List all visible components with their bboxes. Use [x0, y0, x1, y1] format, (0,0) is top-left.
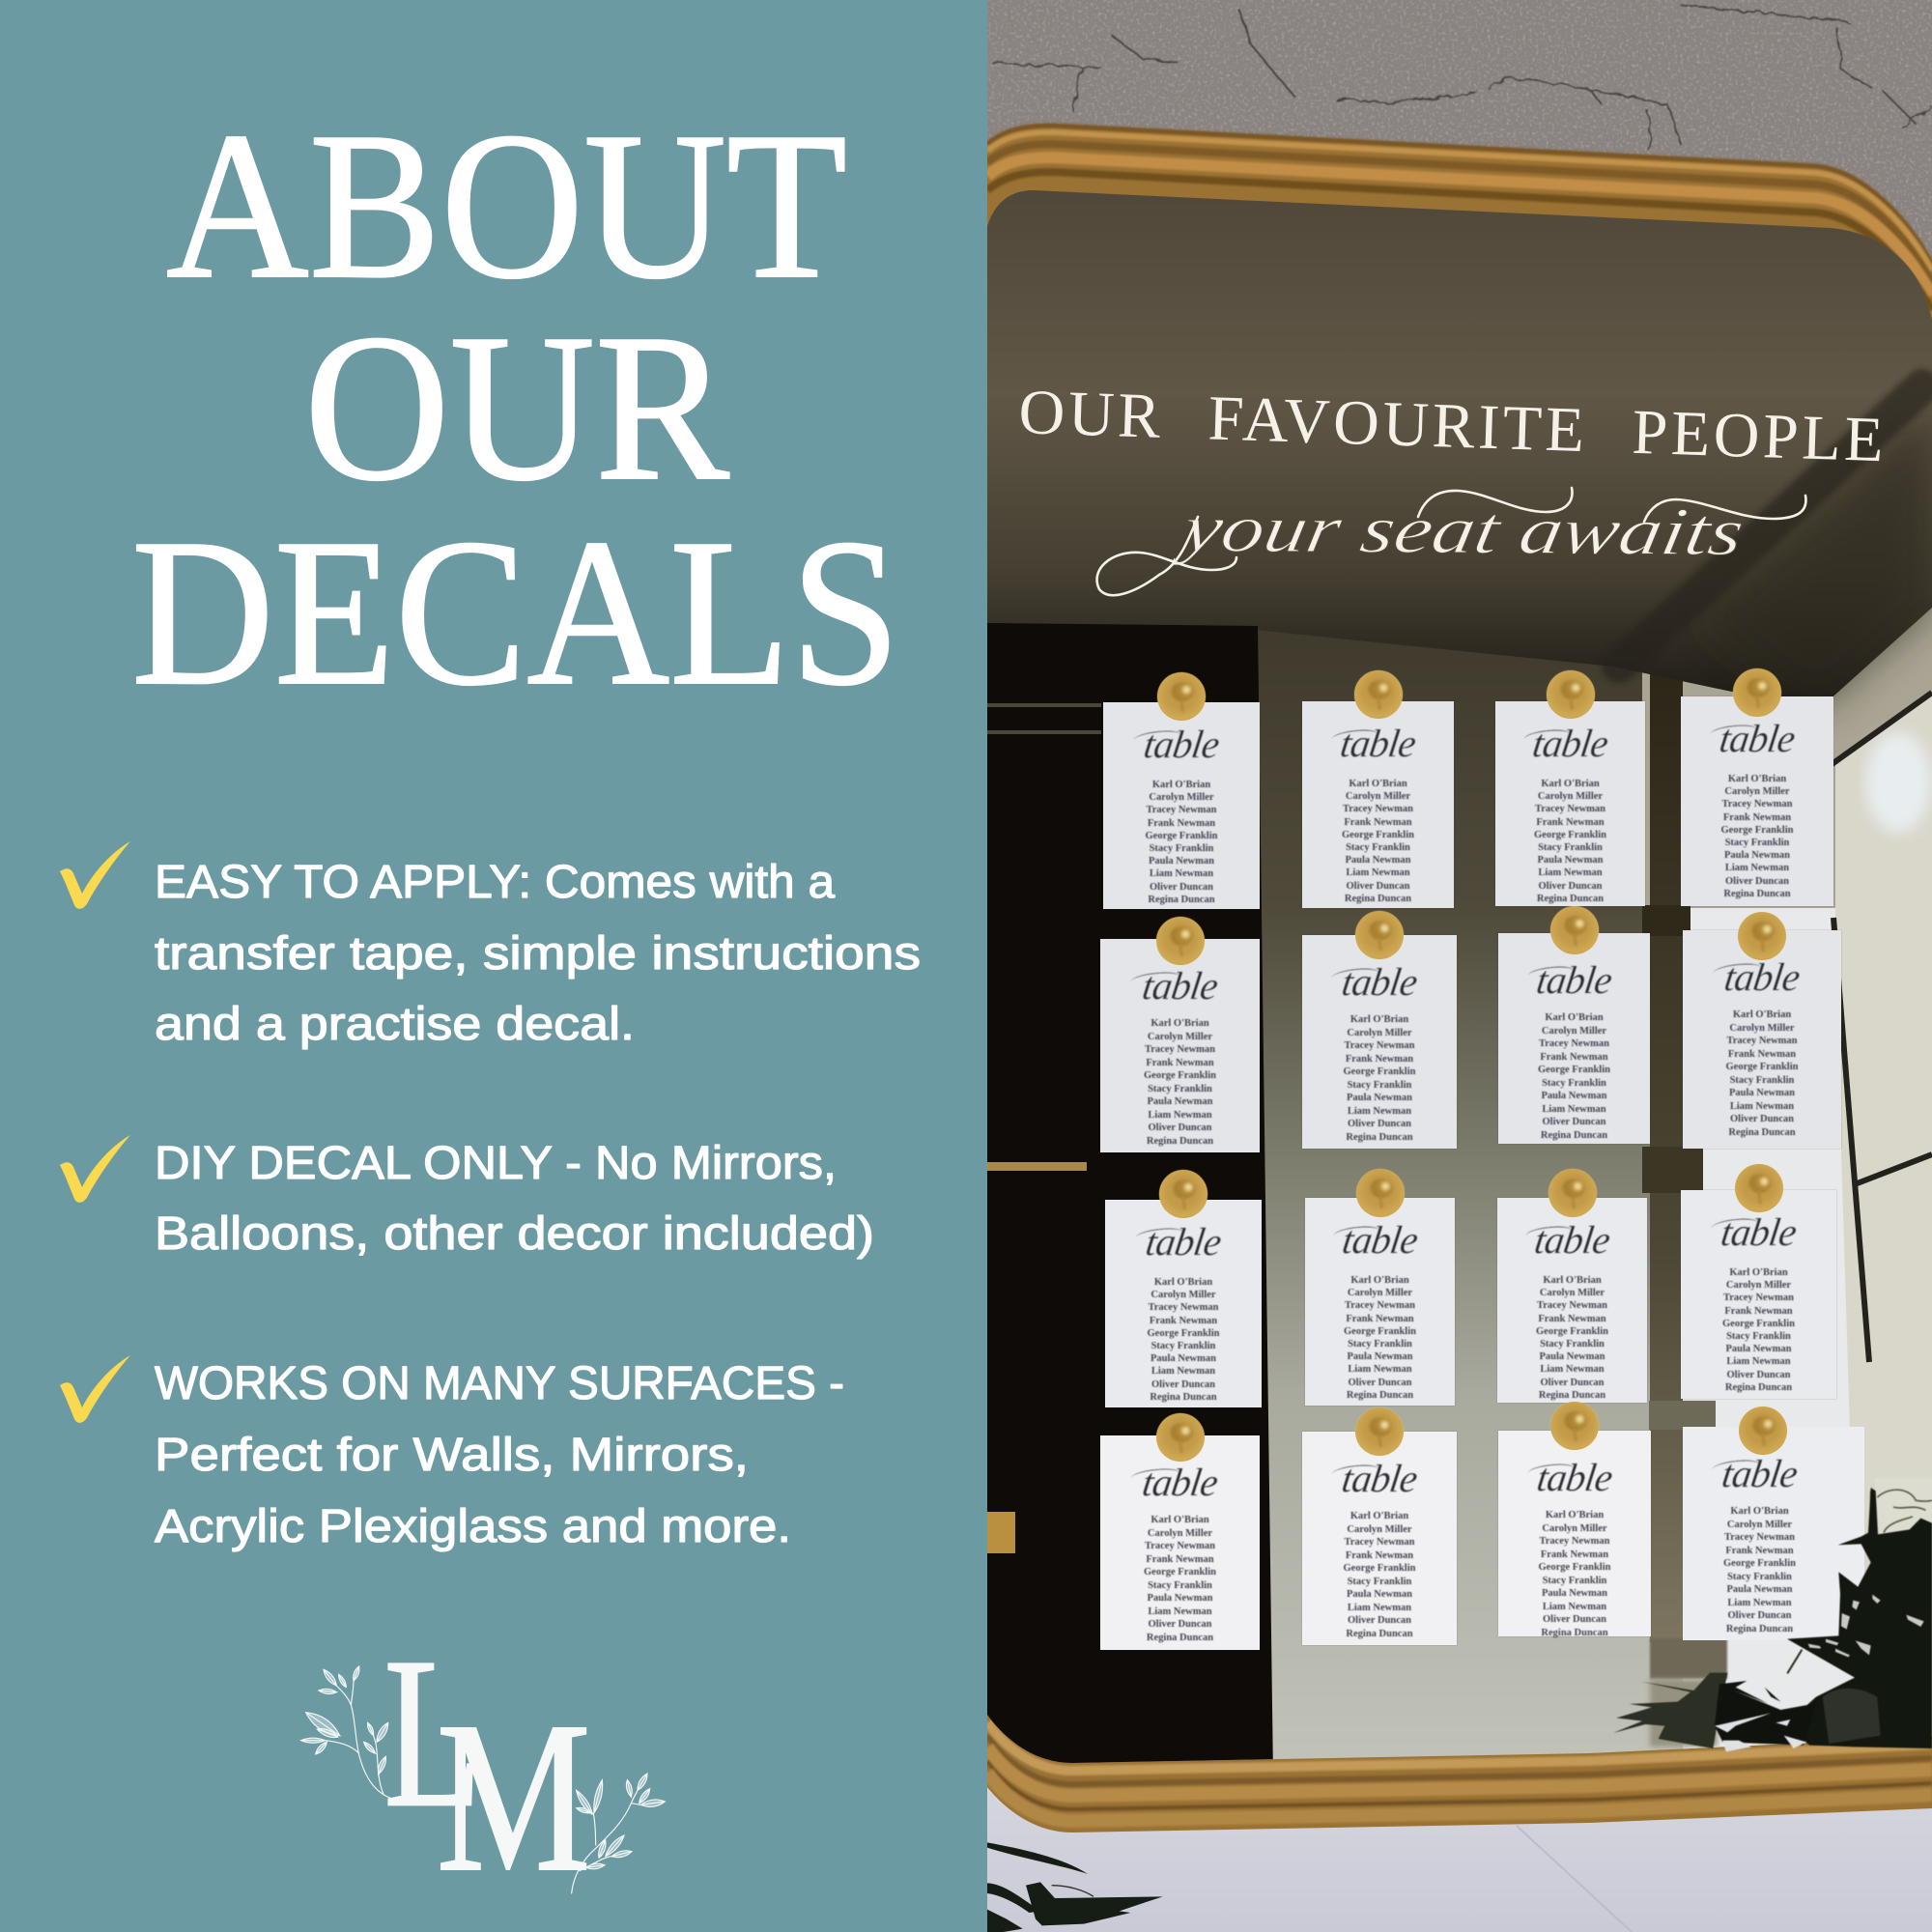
- guest names: George Franklin: [1726, 1062, 1798, 1072]
- guest names: Stacy Franklin: [1151, 1341, 1215, 1351]
- panel: teal left column: [60, 90, 921, 1917]
- card: row 1 column 4: [1681, 696, 1833, 906]
- guest names: Liam Newman: [1727, 1598, 1792, 1607]
- guest names: Oliver Duncan: [1150, 882, 1213, 893]
- title: OUR: [304, 292, 730, 525]
- guest names: Liam Newman: [1346, 867, 1410, 878]
- guest names: [1147, 1277, 1220, 1403]
- guest names: Oliver Duncan: [1540, 1378, 1605, 1388]
- plant: bottom-left leaves: [987, 1842, 1163, 1932]
- wax seal: [1159, 1170, 1208, 1218]
- guest names: Stacy Franklin: [1148, 1084, 1212, 1094]
- wax seal: [1354, 670, 1403, 719]
- guest names: Karl O'Brian: [1154, 1277, 1212, 1288]
- guest names: Carolyn Miller: [1149, 792, 1214, 803]
- guest names: Tracey Newman: [1145, 1044, 1215, 1055]
- script heading: table: [1339, 959, 1420, 1004]
- guest names: [1343, 1275, 1416, 1401]
- title: DECALS: [131, 497, 900, 729]
- guest names: Frank Newman: [1728, 1049, 1796, 1059]
- guest names: George Franklin: [1148, 1328, 1219, 1339]
- mirror glass and reflections: [987, 184, 1932, 1777]
- guest names: Karl O'Brian: [1151, 1515, 1209, 1525]
- script heading: table: [1338, 721, 1418, 765]
- guest names: Liam Newman: [1538, 867, 1603, 878]
- guest names: Carolyn Miller: [1540, 1288, 1605, 1298]
- guest names: Tracey Newman: [1145, 1541, 1215, 1551]
- text block: works on many surfaces: Acrylic Plexiglass and more.: [155, 1501, 791, 1552]
- guest names: Tracey Newman: [1540, 1536, 1609, 1547]
- icon: yellow check 2: [60, 1135, 130, 1203]
- script heading: table: [1140, 1460, 1220, 1504]
- guest names: Liam Newman: [1543, 1602, 1606, 1611]
- guest names: Paula Newman: [1149, 856, 1214, 867]
- guest names: Tracey Newman: [1539, 1038, 1609, 1049]
- guest names: George Franklin: [1344, 1066, 1415, 1077]
- guest names: Oliver Duncan: [1542, 1117, 1606, 1127]
- guest names: Paula Newman: [1729, 1088, 1795, 1098]
- guest names: Regina Duncan: [1347, 1390, 1413, 1401]
- script heading: table: [1534, 957, 1614, 1002]
- guest names: Carolyn Miller: [1148, 1528, 1212, 1538]
- guest names: Karl O'Brian: [1546, 1510, 1604, 1520]
- wax seal: [1550, 1402, 1599, 1450]
- card: row 4 column 2: [1302, 1432, 1457, 1645]
- guest names: Paula Newman: [1346, 855, 1410, 866]
- guest names: Oliver Duncan: [1730, 1114, 1794, 1124]
- guest names: Stacy Franklin: [1730, 1074, 1794, 1086]
- guest names: Frank Newman: [1540, 1051, 1608, 1063]
- guest names: Carolyn Miller: [1348, 1288, 1412, 1298]
- guest names: [1343, 1511, 1416, 1640]
- guest names: Regina Duncan: [1541, 1627, 1608, 1638]
- guest names: [1720, 773, 1794, 900]
- guest names: Oliver Duncan: [1148, 1619, 1212, 1630]
- guest names: Tracey Newman: [1148, 1302, 1219, 1313]
- guest names: Carolyn Miller: [1542, 1522, 1607, 1534]
- guest names: Stacy Franklin: [1150, 843, 1213, 854]
- guest names: Regina Duncan: [1148, 895, 1215, 905]
- guest names: George Franklin: [1723, 1558, 1796, 1569]
- guest names: Paula Newman: [1347, 1093, 1412, 1103]
- guest names: Paula Newman: [1151, 1353, 1216, 1364]
- wax seal: [1356, 1169, 1405, 1217]
- plant: right foreground: [1613, 1478, 1932, 1751]
- script heading: table: [1140, 963, 1220, 1008]
- text block: diy decal only: [155, 1138, 874, 1260]
- guest names: Oliver Duncan: [1348, 1378, 1412, 1388]
- wax seal: [1546, 670, 1594, 719]
- guest names: Paula Newman: [1724, 850, 1790, 861]
- guest names: Frank Newman: [1346, 1053, 1413, 1065]
- guest names: Frank Newman: [1538, 1314, 1606, 1324]
- card: row 3 column 3: [1497, 1198, 1647, 1403]
- guest names: Tracey Newman: [1535, 804, 1605, 814]
- guest names: George Franklin: [1539, 1562, 1610, 1573]
- photo: mirror seating chart scene: [987, 0, 1932, 1932]
- guest names: Karl O'Brian: [1729, 1267, 1788, 1278]
- guest names: Frank Newman: [1148, 818, 1215, 829]
- guest names: George Franklin: [1536, 1326, 1608, 1337]
- logo left leaf spray: [301, 1666, 391, 1799]
- guest names: Stacy Franklin: [1543, 1575, 1606, 1586]
- script heading: table: [1534, 1455, 1615, 1499]
- guest names: Liam Newman: [1348, 1105, 1411, 1117]
- guest names: Carolyn Miller: [1726, 1280, 1791, 1291]
- wax seal: [1738, 912, 1786, 960]
- script heading: table: [1141, 722, 1222, 766]
- guest names: Stacy Franklin: [1348, 1080, 1411, 1090]
- guest names: Oliver Duncan: [1543, 1614, 1606, 1625]
- logo: LM monogram with leaves: [301, 1613, 665, 1917]
- guest names: Frank Newman: [1725, 1546, 1794, 1555]
- guest names: Karl O'Brian: [1543, 1275, 1602, 1286]
- guest names: [1534, 779, 1607, 904]
- guest names: Paula Newman: [1540, 1351, 1605, 1362]
- guest names: George Franklin: [1534, 830, 1606, 840]
- card: row 4 column 1: [1100, 1435, 1260, 1650]
- guest names: George Franklin: [1144, 1567, 1216, 1577]
- title: ABOUT: [166, 90, 847, 323]
- guest names: George Franklin: [1344, 1326, 1416, 1337]
- guest names: Liam Newman: [1151, 1366, 1215, 1377]
- guest names: Regina Duncan: [1723, 889, 1791, 899]
- guest names: Stacy Franklin: [1538, 842, 1603, 853]
- guest names: Karl O'Brian: [1350, 1275, 1409, 1286]
- small leaf cluster: [1613, 1673, 1816, 1751]
- text block: works on many surfaces: [155, 1358, 844, 1552]
- card: row 2 column 3: [1498, 933, 1650, 1144]
- guest names: Regina Duncan: [1537, 894, 1604, 904]
- text block: works on many surfaces: Perfect for Walls, Mirrors,: [155, 1430, 749, 1481]
- guest names: Regina Duncan: [1539, 1390, 1605, 1401]
- script heading: table: [1719, 1451, 1800, 1495]
- guest names: Regina Duncan: [1346, 1629, 1413, 1638]
- guest names: Regina Duncan: [1345, 894, 1411, 904]
- mirror decal: your seat awaits: [1097, 488, 1805, 595]
- pale curly branches: [1869, 1488, 1932, 1534]
- guest names: Frank Newman: [1146, 1057, 1214, 1068]
- script heading: table: [1532, 1217, 1612, 1262]
- guest names: Oliver Duncan: [1346, 881, 1410, 892]
- guest names: Tracey Newman: [1343, 804, 1413, 814]
- guest names: Tracey Newman: [1537, 1300, 1607, 1311]
- guest names: Liam Newman: [1542, 1103, 1606, 1115]
- guest names: Regina Duncan: [1541, 1130, 1607, 1140]
- guest names: Carolyn Miller: [1542, 1026, 1606, 1036]
- guest names: [1538, 1012, 1611, 1142]
- guest names: Regina Duncan: [1725, 1382, 1792, 1393]
- guest names: Paula Newman: [1538, 855, 1603, 866]
- guest names: Karl O'Brian: [1350, 1014, 1408, 1025]
- guest names: Carolyn Miller: [1538, 791, 1603, 802]
- wax seal: [1355, 911, 1404, 959]
- guest names: [1144, 1018, 1217, 1148]
- guest names: Paula Newman: [1726, 1344, 1791, 1354]
- guest names: Tracey Newman: [1345, 1300, 1415, 1311]
- guest names: Tracey Newman: [1345, 1040, 1414, 1051]
- guest names: Paula Newman: [1347, 1589, 1412, 1600]
- guest names: Carolyn Miller: [1151, 1290, 1216, 1300]
- guest names: George Franklin: [1722, 1319, 1795, 1329]
- guest names: George Franklin: [1344, 1563, 1415, 1574]
- guest names: Tracey Newman: [1723, 1293, 1794, 1303]
- guest names: Liam Newman: [1150, 868, 1213, 879]
- guest names: Stacy Franklin: [1727, 1571, 1792, 1582]
- guest names: Frank Newman: [1146, 1553, 1214, 1565]
- card: row 3 column 1: [1105, 1200, 1262, 1407]
- icon: yellow check 3: [60, 1355, 130, 1423]
- guest names: Tracey Newman: [1721, 799, 1793, 810]
- guest names: Liam Newman: [1348, 1364, 1412, 1375]
- guest names: Stacy Franklin: [1348, 1339, 1412, 1350]
- script heading: table: [1339, 1456, 1420, 1500]
- guest names: Paula Newman: [1727, 1584, 1792, 1595]
- text block: works on many surfaces: WORKS ON MANY SURFACES -: [155, 1358, 844, 1409]
- gold frame base: [987, 124, 1932, 1833]
- guest names: [1721, 1267, 1795, 1393]
- guest names: Liam Newman: [1540, 1364, 1605, 1375]
- wax seal: [1155, 1413, 1204, 1462]
- guest names: Paula Newman: [1148, 1096, 1212, 1107]
- card: row 1 column 2: [1302, 701, 1454, 908]
- guest names: Oliver Duncan: [1348, 1119, 1411, 1129]
- guest names: Paula Newman: [1148, 1593, 1212, 1604]
- guest names: [1145, 779, 1218, 906]
- guest names: [1538, 1509, 1611, 1638]
- guest names: Oliver Duncan: [1727, 1610, 1792, 1621]
- guest names: Oliver Duncan: [1538, 881, 1603, 892]
- gold frame top mouldings: [987, 126, 1932, 310]
- guest names: Tracey Newman: [1724, 1532, 1795, 1543]
- guest names: Karl O'Brian: [1350, 1511, 1408, 1521]
- guest names: Stacy Franklin: [1148, 1580, 1212, 1590]
- guest names: Regina Duncan: [1147, 1633, 1213, 1642]
- guest names: Stacy Franklin: [1725, 838, 1789, 848]
- script heading: table: [1721, 954, 1803, 999]
- guest names: Stacy Franklin: [1542, 1078, 1606, 1088]
- guest names: Paula Newman: [1542, 1091, 1606, 1101]
- guest names: Carolyn Miller: [1724, 786, 1790, 797]
- guest names: Regina Duncan: [1150, 1392, 1217, 1403]
- guest names: [1723, 1505, 1797, 1634]
- card: row 2 column 1: [1100, 939, 1260, 1152]
- guest names: George Franklin: [1342, 830, 1414, 840]
- guest names: Oliver Duncan: [1348, 1615, 1411, 1626]
- script heading: table: [1340, 1217, 1420, 1262]
- guest names: Karl O'Brian: [1730, 1506, 1789, 1517]
- guest names: Karl O'Brian: [1541, 779, 1600, 789]
- guest names: Frank Newman: [1724, 1306, 1793, 1317]
- guest names: Liam Newman: [1725, 863, 1789, 873]
- guest names: Oliver Duncan: [1726, 1370, 1791, 1380]
- large dark leaf cluster: [1784, 1488, 1932, 1748]
- wax seal: [1733, 668, 1781, 717]
- card: row 3 column 2: [1305, 1198, 1455, 1406]
- guest names: Regina Duncan: [1726, 1623, 1793, 1634]
- guest names: Oliver Duncan: [1151, 1379, 1215, 1390]
- guest names: Carolyn Miller: [1727, 1519, 1792, 1530]
- plants: foreground greenery: [987, 1488, 1932, 1932]
- guest names: George Franklin: [1538, 1065, 1610, 1075]
- guest names: Liam Newman: [1730, 1101, 1794, 1111]
- script heading: table: [1719, 1209, 1799, 1254]
- guest names: Carolyn Miller: [1148, 1032, 1212, 1041]
- guest names: Frank Newman: [1346, 1314, 1414, 1324]
- guest names: Frank Newman: [1723, 812, 1791, 823]
- card: row 2 column 2: [1302, 935, 1457, 1149]
- guest names: Liam Newman: [1726, 1356, 1791, 1367]
- card: row 4 column 4: [1683, 1427, 1864, 1640]
- script heading: table: [1143, 1219, 1224, 1264]
- guest names: Carolyn Miller: [1729, 1022, 1795, 1034]
- guest names: Carolyn Miller: [1347, 1028, 1412, 1037]
- text block: diy decal only: DIY DECAL ONLY - No Mirrors,: [155, 1138, 837, 1189]
- mirror decal: our favourite people: OUR FAVOURITE PEOPLE: [1018, 377, 1888, 475]
- guest names: [1341, 779, 1414, 904]
- mirror decal: your seat awaits: your seat awaits: [1171, 492, 1749, 570]
- guest names: Oliver Duncan: [1148, 1122, 1212, 1133]
- guest names: Paula Newman: [1542, 1588, 1607, 1599]
- guest names: Stacy Franklin: [1346, 842, 1410, 853]
- wax seal: [1355, 1407, 1404, 1456]
- wax seal: [1549, 906, 1598, 954]
- icon: yellow check 1: [60, 841, 130, 909]
- guest names: Regina Duncan: [1346, 1132, 1413, 1142]
- guest names: Frank Newman: [1150, 1316, 1217, 1326]
- guest names: Stacy Franklin: [1348, 1577, 1411, 1586]
- wax seal: [1155, 917, 1204, 965]
- text block: easy to apply: and a practise decal.: [155, 999, 635, 1050]
- guest names: Stacy Franklin: [1540, 1339, 1605, 1350]
- text block: easy to apply: EASY TO APPLY: Comes with a: [155, 857, 835, 908]
- guest names: [1725, 1009, 1799, 1138]
- guest names: Regina Duncan: [1728, 1126, 1796, 1138]
- guest names: Frank Newman: [1344, 817, 1412, 828]
- guest names: Carolyn Miller: [1346, 791, 1410, 802]
- text block: easy to apply: transfer tape, simple instructions: [155, 928, 921, 980]
- guest names: Karl O'Brian: [1545, 1012, 1604, 1023]
- guest names: [1536, 1275, 1609, 1401]
- guest names: Frank Newman: [1536, 817, 1605, 828]
- guest names: Tracey Newman: [1727, 1036, 1797, 1046]
- card: row 1 column 1: [1103, 702, 1260, 909]
- guest names: Frank Newman: [1346, 1549, 1413, 1561]
- wax seal: [1548, 1169, 1596, 1217]
- guest names: Liam Newman: [1348, 1602, 1411, 1613]
- wax seal: [1739, 1406, 1787, 1455]
- guest names: [1343, 1014, 1416, 1144]
- guest names: Karl O'Brian: [1151, 1018, 1209, 1029]
- guest names: Paula Newman: [1348, 1351, 1412, 1362]
- guest names: Karl O'Brian: [1733, 1009, 1791, 1020]
- guest names: George Franklin: [1146, 831, 1217, 841]
- logo letters LM: M: [437, 1678, 591, 1917]
- brick wall: [987, 0, 1932, 260]
- logo letters LM: [384, 1613, 591, 1917]
- guest names: Liam Newman: [1148, 1109, 1212, 1121]
- logo letters LM: L: [384, 1613, 482, 1852]
- wax seal: [1157, 672, 1206, 721]
- guest names: Oliver Duncan: [1725, 876, 1789, 887]
- guest names: Stacy Franklin: [1726, 1331, 1791, 1342]
- guest names: Karl O'Brian: [1152, 780, 1210, 790]
- card: row 2 column 4: [1683, 930, 1841, 1149]
- guest names: Karl O'Brian: [1728, 774, 1786, 784]
- text block: diy decal only: Balloons, other decor included): [155, 1208, 874, 1260]
- guest names: George Franklin: [1721, 825, 1793, 836]
- white table: [987, 1787, 1932, 1932]
- guest names: Liam Newman: [1148, 1605, 1212, 1617]
- guest names: George Franklin: [1144, 1070, 1216, 1081]
- logo right leaf spray: [572, 1774, 665, 1893]
- title: [131, 90, 900, 729]
- card: row 3 column 4: [1681, 1190, 1836, 1399]
- guest names: Karl O'Brian: [1349, 779, 1407, 789]
- guest names: Tracey Newman: [1345, 1537, 1414, 1548]
- card: row 4 column 3: [1498, 1431, 1651, 1636]
- guest names: Regina Duncan: [1147, 1136, 1213, 1146]
- guest names: Carolyn Miller: [1347, 1524, 1412, 1534]
- gold frame bottom mouldings: [987, 1722, 1932, 1821]
- guest names: Tracey Newman: [1146, 805, 1217, 815]
- card: row 1 column 3: [1495, 701, 1645, 906]
- guest names: Frank Newman: [1541, 1549, 1608, 1559]
- script heading: table: [1530, 721, 1610, 765]
- script heading: table: [1717, 716, 1798, 760]
- wax seal: [1735, 1164, 1783, 1212]
- guest names: [1144, 1515, 1217, 1644]
- text block: easy to apply: [155, 857, 921, 1050]
